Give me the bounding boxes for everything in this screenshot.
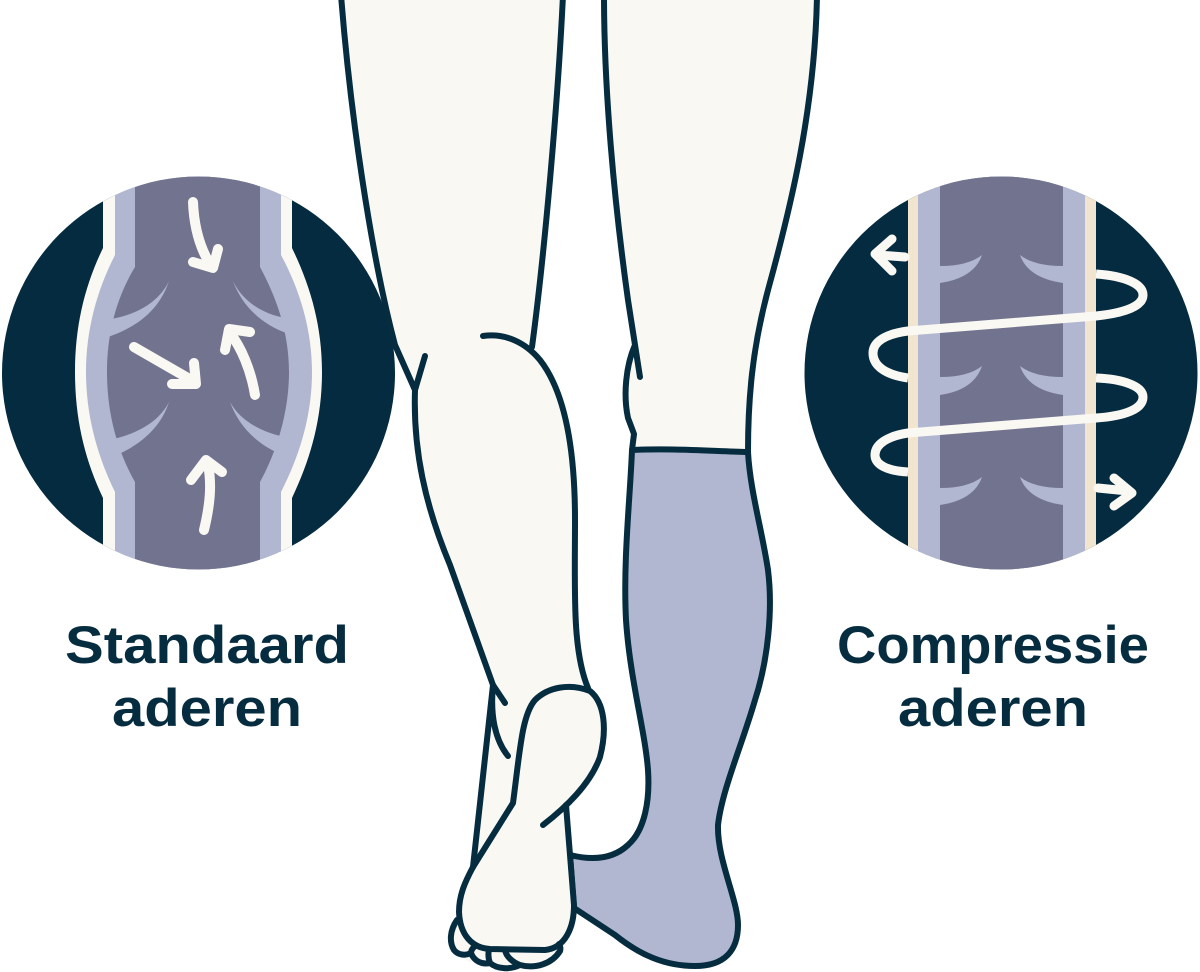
left leg skin [341,0,605,967]
label: standard veins: Standaard [65,616,349,675]
calf contour [483,335,588,688]
label: compression veins: Compressie [837,616,1149,675]
ankle contour [473,685,508,867]
right leg outline [604,0,817,452]
arrows: chaotic blood flow [134,202,255,530]
toes [451,920,560,968]
label: standard veins [65,616,349,738]
foot sole [459,687,604,950]
arrow: compression spiral [873,239,1143,506]
circle background [804,176,1198,570]
label: standard veins: aderen [112,679,302,738]
thigh outer contour [341,0,415,390]
thigh inner contour [532,0,563,347]
compression sock [570,449,770,966]
vein valves [108,281,289,454]
circle background [2,176,395,570]
vein: bulging vessel [75,170,322,580]
vein: straight vessel [908,170,1096,580]
label: compression veins: aderen [898,679,1088,738]
panel: compression veins circle [804,170,1198,580]
knee crease [415,356,505,703]
right thigh, bare skin [604,0,817,452]
panel: standard veins circle [2,170,395,580]
illustration: right leg with compression sock [570,0,817,966]
vein valves [940,255,1063,505]
illustration: left leg lifted, showing sole [341,0,605,968]
label: compression veins [837,616,1149,738]
